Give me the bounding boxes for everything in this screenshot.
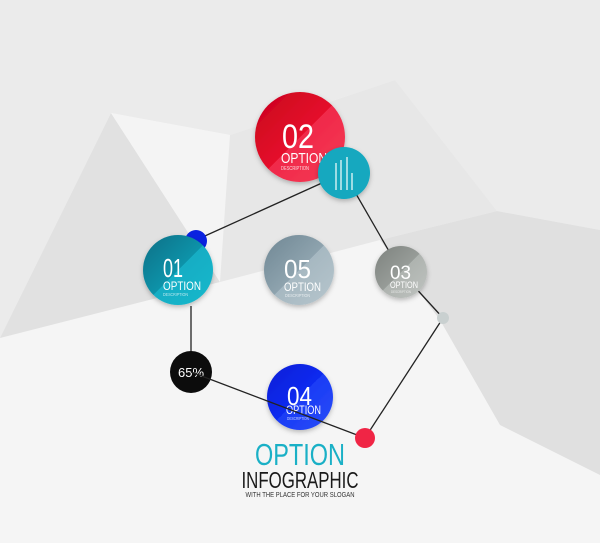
circle 05: 05 xyxy=(284,254,311,284)
circle 02 xyxy=(255,92,345,182)
title xyxy=(242,437,358,499)
circle 04: DESCRIPTION xyxy=(287,416,309,421)
title: OPTION xyxy=(255,437,345,472)
circle 05: OPTION xyxy=(284,280,321,294)
small grey dot xyxy=(437,312,449,324)
red dot xyxy=(355,428,375,448)
circle 01: OPTION xyxy=(163,279,201,293)
title: INFOGRAPHIC xyxy=(242,467,358,493)
circle 04: OPTION xyxy=(286,403,321,417)
line 65% to red dot xyxy=(191,372,365,438)
circle 65%: 65% xyxy=(178,365,204,380)
title: WITH THE PLACE FOR YOUR SLOGAN xyxy=(246,492,354,499)
circle 03 xyxy=(375,246,427,298)
circle 04: 04 xyxy=(287,381,312,411)
circle 05 xyxy=(264,235,334,305)
small blue dot xyxy=(185,230,207,252)
circle 05: DESCRIPTION xyxy=(285,293,310,298)
circle 02: DESCRIPTION xyxy=(281,166,309,172)
circle 03: 03 xyxy=(390,263,411,284)
circle 01: DESCRIPTION xyxy=(163,292,188,297)
circle 65% xyxy=(170,351,212,393)
circle 02: OPTION xyxy=(281,150,327,167)
circle 04 xyxy=(267,364,333,430)
circle 02: 02 xyxy=(282,118,314,156)
circle 03: OPTION xyxy=(390,280,418,290)
icon circle: bar chart xyxy=(318,147,370,199)
circle 03: DESCRIPTION xyxy=(391,290,411,294)
circle 01 xyxy=(143,235,213,305)
connector lines xyxy=(191,173,443,438)
circle 01: 01 xyxy=(163,253,183,283)
